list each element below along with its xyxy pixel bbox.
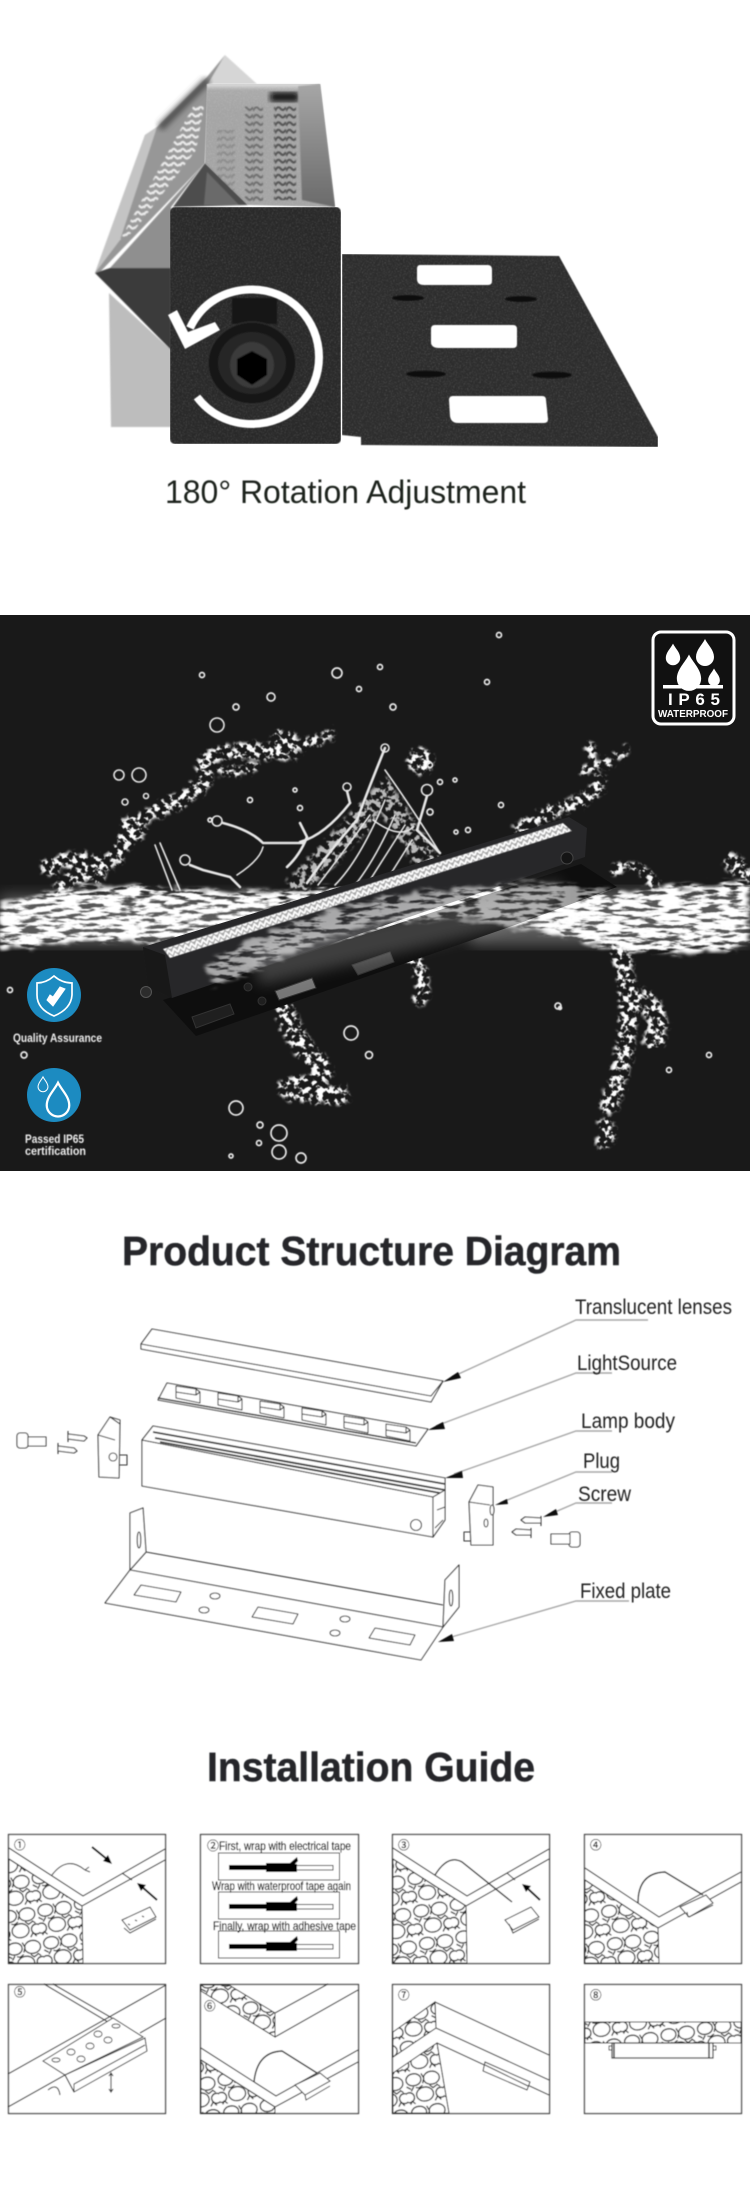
- step 5: [8, 1984, 166, 2114]
- product: lamp body with LED lens: [140, 817, 617, 1036]
- water in front of the lamp: [205, 880, 720, 987]
- step 2: Finally, wrap with adhesive tape: [213, 1919, 356, 1933]
- product photo: lamp top with lens: [205, 84, 335, 207]
- arrow: white 180 degree rotation arrow: [168, 290, 319, 424]
- step 4: [584, 1834, 742, 1964]
- step 6: ⑥: [204, 2000, 216, 2013]
- step 4: ④: [590, 1839, 602, 1852]
- step 1: ①: [14, 1839, 26, 1852]
- label: screw: Screw: [578, 1482, 631, 1506]
- icon: quality assurance shield: [27, 968, 81, 1022]
- step 2: ②: [207, 1839, 219, 1853]
- icon: water drops badge: [27, 1068, 81, 1122]
- panel background: [0, 615, 750, 1171]
- badge text waterproof: WATERPROOF: [658, 709, 728, 720]
- part: right plug: [464, 1485, 494, 1545]
- badge text IP65: IP65: [668, 690, 720, 709]
- plate slots: [192, 952, 394, 1028]
- step 1: [8, 1834, 166, 1964]
- badge: IP65 waterproof: [653, 632, 734, 724]
- part: left plug: [98, 1417, 127, 1478]
- label: translucent lenses: Translucent lenses: [575, 1295, 732, 1319]
- caption: 180 degree rotation adjustment: 180° Rotation Adjustment: [165, 474, 526, 510]
- label: passed IP65 certification: [25, 1132, 86, 1158]
- icon: water drops: [663, 639, 723, 691]
- callouts: part labels and leaders: [428, 1295, 732, 1642]
- label: light source: LightSource: [577, 1351, 677, 1375]
- droplets and bubbles: [8, 632, 712, 1163]
- label: passed IP65 certification: Passed IP65: [25, 1132, 84, 1146]
- product photo: mounting plate with slots: [342, 254, 658, 447]
- step 2: [200, 1834, 358, 1964]
- product photo: translucent rotated ghost of the lamp: [95, 55, 257, 427]
- icon: hex bolt: [208, 298, 296, 404]
- step 2: Wrap with waterproof tape again: [212, 1879, 351, 1893]
- label: plug: Plug: [583, 1449, 620, 1473]
- label: lamp body: Lamp body: [581, 1409, 675, 1433]
- step 3: ③: [398, 1839, 410, 1852]
- step 2: First, wrap with electrical tape: [219, 1839, 351, 1853]
- step 7: [392, 1984, 550, 2114]
- part: right screws: [512, 1516, 580, 1547]
- heading: product structure diagram: Product Structure Diagram: [122, 1228, 621, 1274]
- step 6: [200, 1984, 358, 2114]
- water band: [0, 878, 750, 953]
- label: quality assurance: Quality Assurance: [13, 1031, 102, 1045]
- label: passed IP65 certification: certification: [25, 1144, 86, 1158]
- chart: exploded structure drawing: [17, 1329, 580, 1660]
- heading: installation guide: Installation Guide: [207, 1744, 535, 1790]
- part: fixed plate: [105, 1508, 459, 1660]
- product photo: front end plate: [170, 207, 341, 444]
- thin water filaments: [114, 718, 440, 890]
- step 7: ⑦: [398, 1989, 410, 2002]
- part: left screws: [17, 1431, 87, 1454]
- part: translucent lens: [141, 1329, 443, 1402]
- step 5: ⑤: [14, 1986, 26, 1999]
- step 8: [584, 1984, 742, 2114]
- panel: IP65 waterproof splash: [0, 615, 750, 1171]
- label: fixed plate: Fixed plate: [580, 1579, 671, 1603]
- panel: installation steps: [8, 1834, 742, 2114]
- lens wave rows and end block: [173, 84, 335, 207]
- panel: 180 degree rotation product photo: [95, 55, 658, 510]
- part: LED light source: [158, 1383, 428, 1446]
- step 3: [392, 1834, 550, 1964]
- plate slots and holes: [392, 265, 572, 423]
- part: lamp body: [142, 1426, 445, 1537]
- step 8: ⑧: [590, 1989, 602, 2002]
- water splash behind the lamp: [0, 718, 750, 1142]
